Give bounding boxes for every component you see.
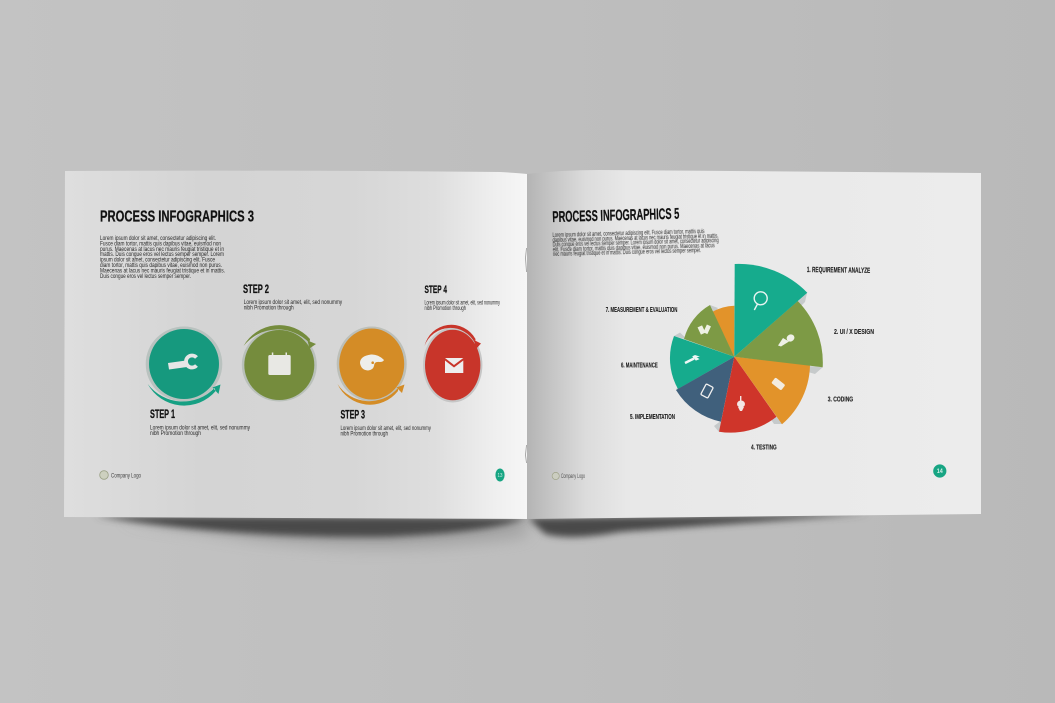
- step 4 text: STEP 4: [424, 284, 448, 296]
- label 4: 4. TESTING: [751, 443, 777, 452]
- pie labels: [606, 265, 874, 452]
- arrow: [338, 384, 404, 405]
- step 4 circle: [423, 325, 482, 402]
- slice shadows: [674, 293, 823, 432]
- company logo: Company Logo: [111, 472, 141, 480]
- slice 3: orange: [734, 357, 810, 424]
- intro text: dapibus vitae, euismod non purus. Maecenas at lacus nec mauris feugiat tristique et in mattis.: [552, 232, 719, 244]
- page number 14: [933, 464, 946, 478]
- step 3 text: STEP 3: [340, 410, 365, 422]
- intro text: Duis congue eros vel lectus semper semper.: [100, 273, 191, 280]
- intro text: ipsum dolor sit amet, consectetur adipiscing elit. Fusce: [100, 257, 215, 264]
- step 3 text: Lorem ipsum dolor sit amet, elit, sed nonummy: [340, 426, 431, 432]
- intro text: Lorem ipsum dolor sit amet, consectetur adipiscing elit.: [100, 235, 216, 242]
- company logo: Company Logo: [561, 473, 585, 480]
- icon: magnifier: [754, 292, 767, 310]
- step 4 text: nibh Promotion through: [424, 306, 466, 312]
- arrow: [148, 384, 220, 406]
- intro text: Duis congue eros vel lectus semper semper. Lorem ipsum dolor sit amet, consectetur adipiscing: [553, 237, 719, 249]
- page number 13: [495, 468, 505, 482]
- step 4 text: [424, 284, 500, 312]
- label 5: 5. IMPLEMENTATION: [630, 412, 675, 421]
- step 4 text: Lorem ipsum dolor sit amet, elit, sed nonummy: [424, 300, 500, 306]
- step 2 text: Lorem ipsum dolor sit amet, elit, sed nonummy: [244, 300, 342, 306]
- page shadows: [95, 514, 870, 547]
- intro text: diam tortor, mattis quis dapibus vitae, euismod non purus.: [100, 262, 222, 269]
- company logo: [552, 472, 585, 480]
- step 1 text: STEP 1: [150, 409, 175, 421]
- slice 7: green: [684, 305, 734, 357]
- icon: wrench: [168, 355, 196, 370]
- icon: plug: [737, 396, 745, 411]
- intro text: elit. Fusce diam tortor, mattis quis dapibus vitae, euismod non purus. Maecenas at lacus: [553, 242, 715, 253]
- icon: envelope: [445, 358, 463, 373]
- intro text: [552, 228, 719, 258]
- intro text: Maecenas at lacus nec mauris feugiat tristique et in mattis.: [100, 267, 225, 274]
- label 2: 2. UI / X DESIGN: [834, 327, 874, 336]
- step 1 text: [150, 409, 250, 437]
- binding marks: [526, 248, 527, 463]
- left page: [64, 171, 527, 519]
- step 3 circle: [337, 326, 407, 405]
- title: process infographics 5: PROCESS INFOGRAPHICS 5: [552, 206, 680, 226]
- intro text: purus. Maecenas at lacus nec mauris feugiat tristique et in: [100, 246, 224, 253]
- step 2 text: STEP 2: [243, 284, 269, 296]
- icon: palette: [360, 354, 384, 370]
- step 3 text: [340, 410, 431, 438]
- icon: dropper: [778, 333, 796, 346]
- step 2 text: [243, 284, 342, 312]
- right page: [527, 170, 981, 519]
- slice 2: green: [734, 301, 823, 367]
- icon: tool: [698, 325, 711, 335]
- icon: phone: [701, 384, 713, 398]
- title: process infographics 3: PROCESS INFOGRAPHICS 3: [100, 208, 254, 226]
- step 2 text: nibh Promotion through: [244, 306, 294, 312]
- intro text: [100, 235, 225, 280]
- intro text: nec mauris feugiat tristique et in mattis. Duis congue eros vel lectus semper semper.: [553, 247, 701, 258]
- label 6: 6. MAINTENANCE: [621, 361, 658, 370]
- slice 5: blue: [676, 357, 734, 422]
- page number 14: 14: [937, 468, 943, 475]
- pie chart: [670, 264, 823, 433]
- intro text: Lorem ipsum dolor sit amet, consectetur adipiscing elit. Fusce diam tortor, mattis quis: [552, 228, 705, 239]
- icon: pencil: [771, 377, 785, 391]
- label 7: 7. MEASUREMENT & EVALUATION: [606, 305, 677, 314]
- step 1 circle: [146, 326, 222, 406]
- intro text: Fusce diam tortor, mattis quis dapibus vitae, euismod non: [100, 240, 221, 247]
- icon: calendar: [268, 352, 291, 375]
- slice 1: teal: [734, 264, 807, 357]
- step 3 text: nibh Promotion through: [340, 432, 388, 438]
- arrow: [424, 325, 481, 349]
- label 1: 1. REQUIREMENT ANALYZE: [807, 265, 870, 275]
- slice 6: teal: [670, 336, 734, 389]
- slice 4: red: [719, 357, 776, 433]
- page number 13: 13: [498, 473, 502, 479]
- icon: wrench: [685, 356, 698, 363]
- intro text: mattis. Duis congue eros vel lectus semper semper. Lorem: [100, 251, 224, 258]
- slice 8: orange: [712, 306, 734, 357]
- label 3: 3. CODING: [828, 395, 853, 404]
- step 1 text: Lorem ipsum dolor sit amet, elit, sed nonummy: [150, 426, 250, 432]
- step 2 circle: [242, 325, 317, 402]
- company logo: [100, 471, 141, 480]
- step 1 text: nibh Promotion through: [150, 431, 201, 437]
- arrow: [244, 325, 316, 348]
